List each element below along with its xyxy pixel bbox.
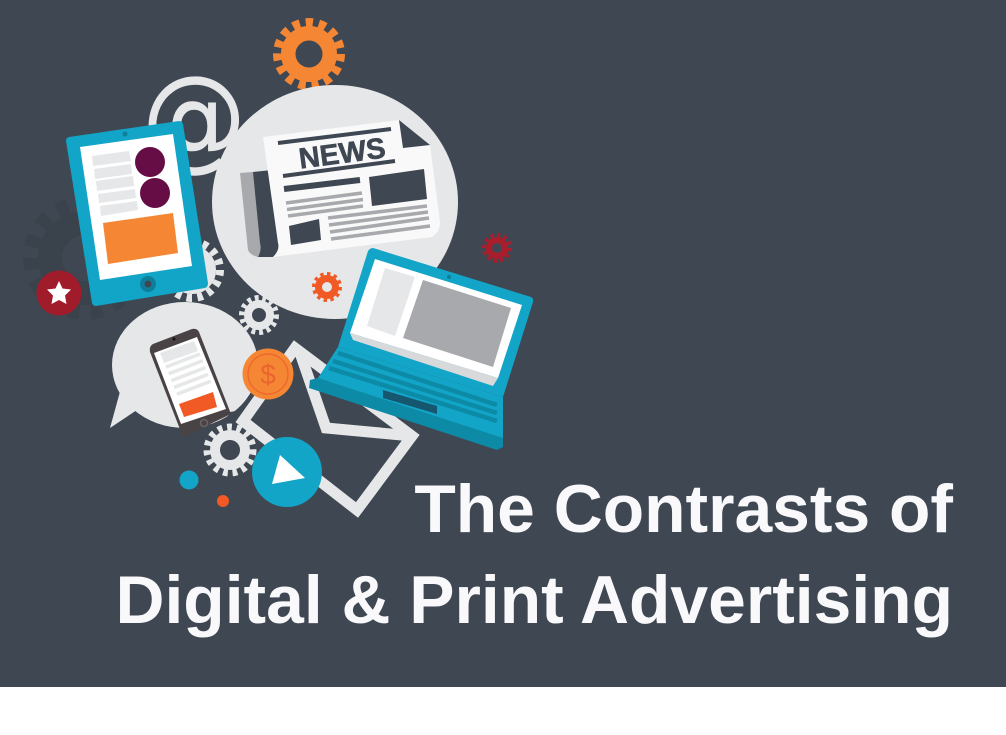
icon: at sign: @ xyxy=(142,52,246,183)
icon: newspaper xyxy=(240,120,440,257)
icon: red star badge xyxy=(36,270,82,316)
icon: smartphone xyxy=(150,329,242,437)
icon: play button xyxy=(252,437,322,507)
title line 1: The Contrasts of xyxy=(414,472,953,547)
title line 2: Digital & Print Advertising xyxy=(116,563,953,638)
icon: dollar coin xyxy=(242,348,294,400)
decorative orange dot xyxy=(217,495,229,507)
icon: small grey gear xyxy=(242,298,276,332)
icon: envelope xyxy=(243,348,412,510)
icon: gear behind tablet xyxy=(164,242,220,298)
newspaper headline: NEWS xyxy=(297,132,387,176)
icon: dark background gear xyxy=(32,205,138,311)
phone speech bubble xyxy=(110,302,258,428)
newspaper speech bubble xyxy=(212,85,458,319)
decorative teal dot xyxy=(180,470,198,490)
icon: orange gear xyxy=(278,22,340,86)
title xyxy=(116,472,953,638)
icon: tablet xyxy=(66,121,208,306)
icon: dollar coin: $ xyxy=(260,359,276,390)
icon: dark red gear xyxy=(484,235,510,261)
icon: grey gear below phone xyxy=(207,427,253,473)
icon: laptop xyxy=(309,248,533,450)
icon: orange-red gear xyxy=(314,274,340,300)
